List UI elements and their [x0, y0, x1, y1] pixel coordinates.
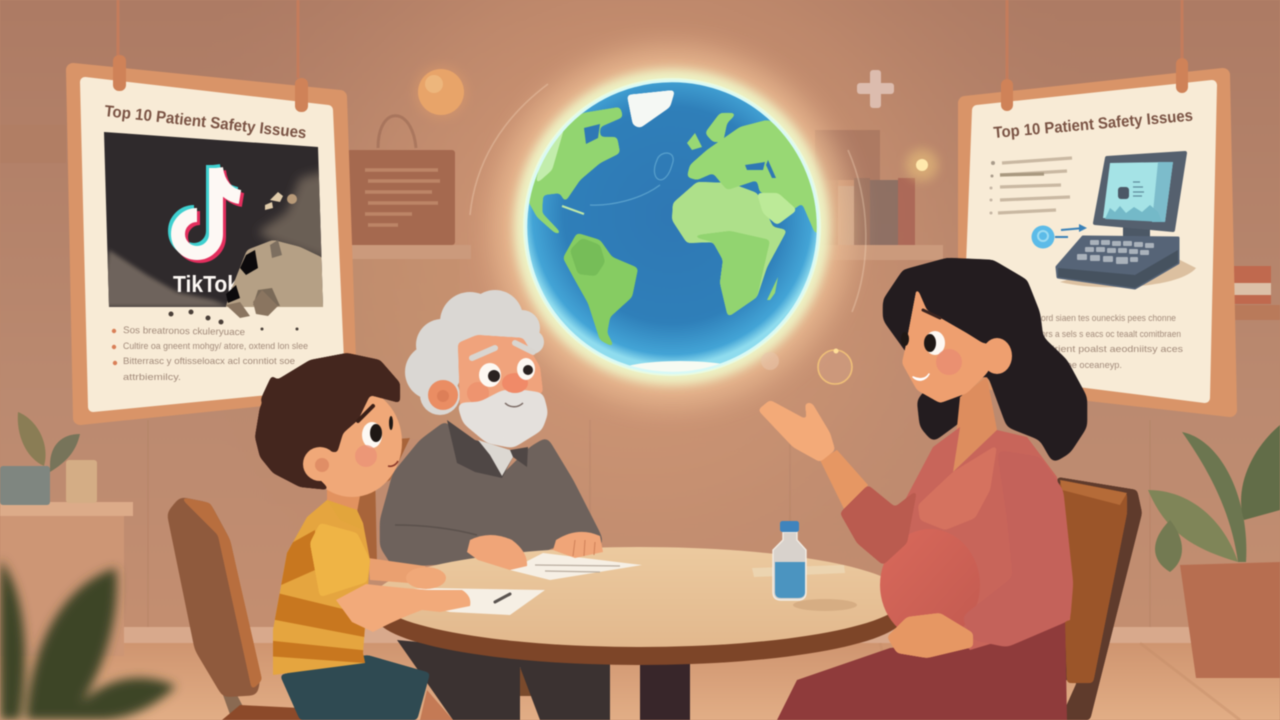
table	[370, 547, 905, 720]
cheek	[355, 445, 377, 467]
ear	[982, 338, 1012, 374]
image: TikTok logo crumbling	[100, 128, 330, 312]
bottle shadow	[793, 599, 857, 611]
papers on table	[510, 553, 642, 580]
far arm	[368, 558, 435, 585]
icon: TikTok note	[175, 165, 243, 256]
poster clips, right	[1001, 58, 1188, 111]
right chair	[1057, 477, 1142, 720]
trousers	[397, 640, 610, 720]
icon: computer terminal	[1057, 153, 1196, 288]
poster bullet list	[112, 325, 308, 383]
eye and brow	[362, 422, 382, 448]
boy	[255, 353, 470, 720]
mouth	[388, 461, 398, 466]
head	[302, 387, 402, 497]
flying rubble	[168, 192, 298, 330]
near arm and hand	[336, 584, 470, 632]
poster body text: prs a sels s eacs oc teaalt comitbraen	[1041, 329, 1181, 340]
light sparkle	[906, 149, 938, 181]
Caribbean islands	[562, 206, 584, 214]
poster heading: Top 10 Patient Safety Issues	[104, 103, 307, 142]
cheek	[936, 349, 962, 375]
near sleeve	[962, 450, 1073, 647]
pen	[495, 594, 510, 602]
left cabinet with plant and boxes	[0, 412, 133, 656]
back hair	[883, 258, 1087, 463]
open hand	[758, 400, 835, 462]
poster bullet list: Bitterrasc y oftisseloacx acl conntiot soe	[123, 356, 295, 367]
shorts	[280, 655, 430, 720]
neck	[953, 377, 997, 472]
poster bullet list: attrbiemilcy.	[123, 372, 181, 383]
raised sleeve	[840, 485, 917, 565]
sleeve	[310, 523, 370, 597]
front hair	[883, 258, 1040, 345]
neck	[327, 485, 362, 512]
skirt	[777, 615, 1067, 720]
striped shirt	[273, 500, 370, 675]
ear	[303, 447, 337, 481]
continent: Eurasia	[687, 120, 830, 233]
ear	[428, 380, 458, 410]
beard	[457, 390, 548, 448]
face	[458, 335, 543, 407]
hair	[255, 353, 400, 490]
poster body text: soe oceaneyp.	[1062, 360, 1122, 371]
sticks	[752, 565, 845, 577]
eyes and brows	[479, 363, 501, 387]
woman	[758, 258, 1087, 720]
decorative orb	[414, 65, 468, 119]
continent: North America	[526, 107, 623, 235]
foreground blurred plant	[0, 560, 176, 720]
belly	[880, 529, 980, 641]
poster bullet list: Cultire oa gneent mohgy/ atore, oxtend lon slee	[123, 341, 308, 352]
logo wordmark: TikTok	[173, 271, 239, 297]
poster body text: ord siaen tes ouneckis pees chonne	[1041, 313, 1176, 324]
old man hands on the table	[467, 532, 603, 570]
panel: right poster about electronic records	[965, 75, 1230, 410]
poster heading: Top 10 Patient Safety Issues	[993, 108, 1194, 142]
old man	[380, 290, 610, 720]
icon: medical plus	[857, 70, 894, 108]
panel: left poster about TikTok	[73, 70, 350, 418]
poster body text: dvirient poalst aeodniitsy aces	[1041, 344, 1183, 355]
torso	[890, 427, 1073, 650]
left chair	[167, 497, 315, 720]
face	[902, 287, 1005, 403]
globe	[494, 49, 850, 405]
hair	[405, 290, 544, 415]
floating bubbles	[761, 348, 852, 384]
poster bullet list: Sos breatronos ckuleryuace	[123, 325, 245, 338]
continent: South America	[563, 233, 638, 348]
hanging cords for posters	[118, 0, 1182, 84]
nose	[502, 373, 528, 393]
smile	[913, 374, 929, 380]
poster clips, left	[113, 55, 308, 112]
collar	[447, 420, 528, 478]
continent: Africa	[671, 181, 786, 298]
hand on belly	[887, 613, 973, 658]
polar snow	[630, 360, 720, 372]
poster body text	[1041, 313, 1183, 371]
right potted plant	[1148, 425, 1280, 678]
placeholder list lines	[990, 158, 1072, 214]
globe orbit arcs	[470, 84, 866, 312]
eyes and brow	[925, 331, 945, 355]
wall shelves and books	[0, 116, 1280, 439]
water bottle	[773, 521, 806, 600]
raised forearm	[820, 450, 868, 515]
chair behind old man	[357, 438, 550, 696]
icon: blue badge and arrows	[1032, 224, 1087, 248]
continent: Greenland	[627, 90, 675, 128]
sweater	[380, 420, 602, 567]
